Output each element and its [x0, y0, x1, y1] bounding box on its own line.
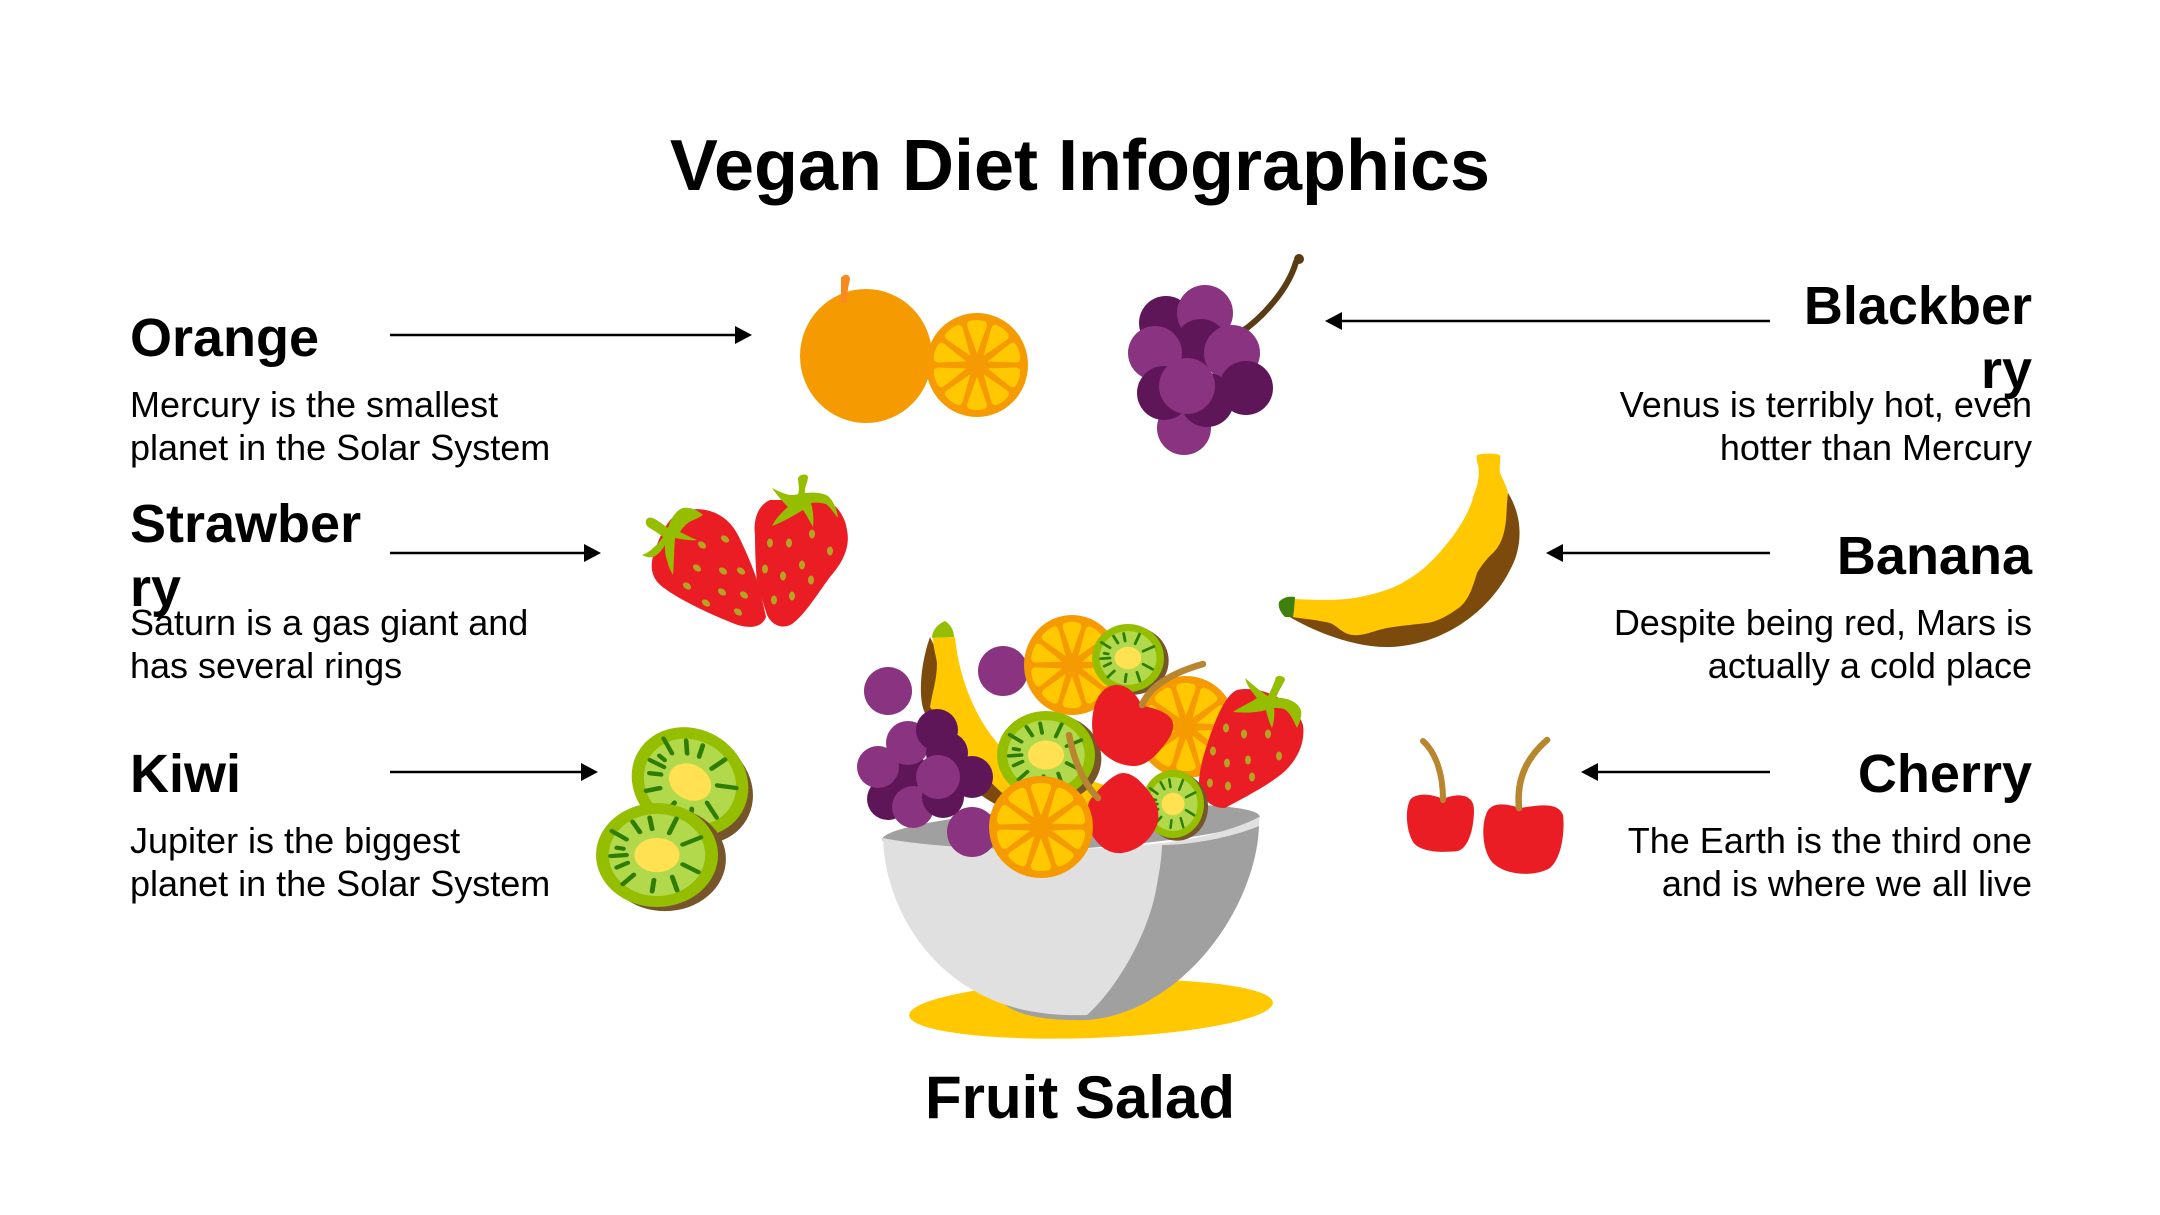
bowl banana: [921, 621, 1120, 810]
arrow: cherry: [1581, 763, 1770, 781]
icon: kiwi slices: [596, 706, 775, 911]
panel: orange text: [130, 308, 550, 468]
bowl light side: [883, 838, 1162, 1015]
bowl caption: Fruit Salad: [925, 1064, 1235, 1131]
illustration: fruit bowl: [857, 615, 1303, 1044]
icon: strawberries: [642, 474, 848, 627]
arrow: orange: [390, 326, 752, 344]
description: strawberry: has several rings: [130, 645, 402, 686]
icon: cherries: [1407, 740, 1564, 874]
description: blackberry: Venus is terribly hot, even: [1620, 384, 2032, 425]
description: strawberry: Saturn is a gas giant and: [130, 602, 528, 643]
bowl dark side: [1000, 825, 1259, 1020]
arrow: blackberry: [1325, 312, 1770, 330]
panel: blackberry text: [1620, 276, 2032, 468]
heading: blackberry: Blackber: [1804, 276, 2032, 336]
heading: kiwi: Kiwi: [130, 744, 241, 804]
icon: orange fruit: [800, 275, 1028, 423]
icon: banana: [1279, 454, 1520, 647]
bowl strawberry: [1199, 676, 1303, 808]
arrow: kiwi: [390, 763, 598, 781]
bowl cherry upper: [1092, 664, 1203, 766]
panel: banana text: [1614, 526, 2033, 686]
description: cherry: and is where we all live: [1662, 863, 2032, 904]
bowl orange top: [1024, 615, 1120, 715]
heading: orange: Orange: [130, 308, 319, 368]
heading: strawberry: Strawber: [130, 494, 361, 554]
description: banana: actually a cold place: [1708, 645, 2032, 686]
description: kiwi: Jupiter is the biggest: [130, 820, 460, 861]
bowl kiwi lower right: [1142, 770, 1208, 841]
bowl orange right: [1136, 676, 1236, 778]
arrow: banana: [1546, 544, 1770, 562]
icon: blackberry bunch: [1128, 254, 1304, 455]
heading: blackberry: ry: [1981, 340, 2032, 400]
description: banana: Despite being red, Mars is: [1614, 602, 2032, 643]
arrow: strawberry: [390, 544, 601, 562]
description: blackberry: hotter than Mercury: [1720, 427, 2032, 468]
bowl lip: [1140, 817, 1259, 845]
bowl kiwi middle: [997, 711, 1101, 803]
title: Vegan Diet Infographics: [670, 126, 1490, 206]
bowl cherry lower: [1069, 735, 1158, 853]
heading: cherry: Cherry: [1858, 744, 2032, 804]
bowl orange bottom: [989, 776, 1093, 878]
panel: cherry text: [1628, 744, 2032, 904]
panel: kiwi text: [130, 744, 550, 904]
bowl loose grapes: [864, 646, 1028, 857]
description: orange: planet in the Solar System: [130, 427, 550, 468]
heading: strawberry: ry: [130, 558, 181, 618]
bowl grape cluster: [857, 709, 993, 828]
bowl back rim: [881, 796, 1261, 860]
description: kiwi: planet in the Solar System: [130, 863, 550, 904]
table shadow: [908, 974, 1274, 1044]
description: cherry: The Earth is the third one: [1628, 820, 2032, 861]
panel: strawberry text: [130, 494, 528, 686]
heading: banana: Banana: [1837, 526, 2033, 586]
bowl kiwi top: [1092, 624, 1169, 695]
description: orange: Mercury is the smallest: [130, 384, 498, 425]
